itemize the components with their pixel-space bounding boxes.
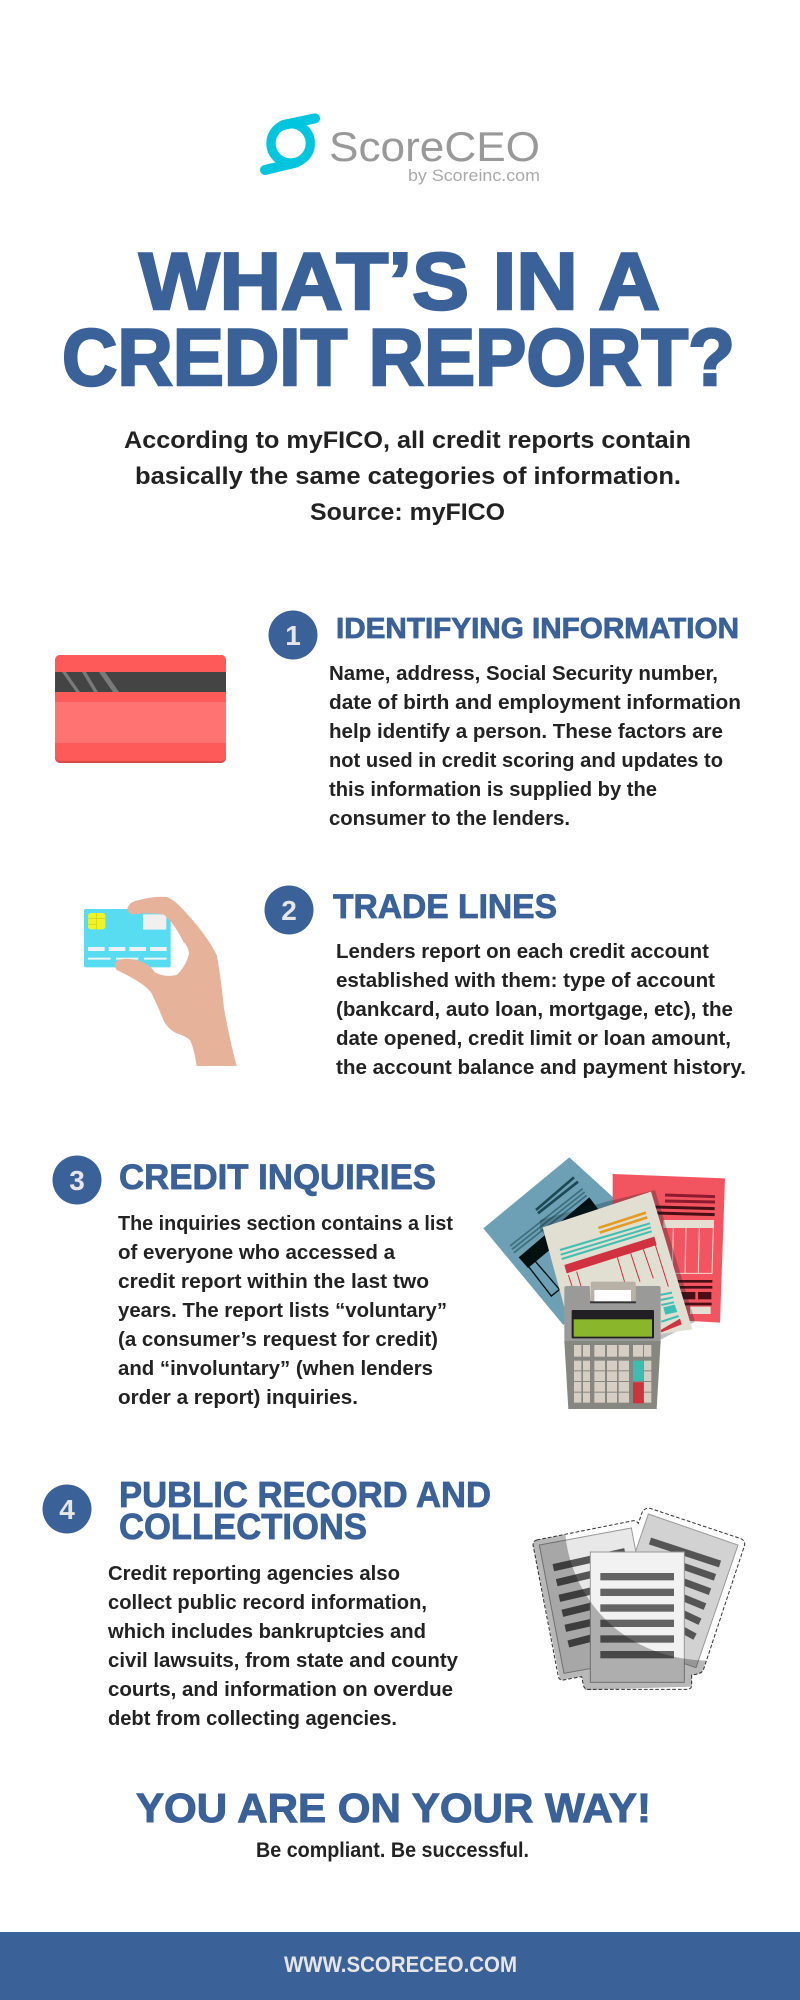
body text 4: debt from collecting agencies. — [108, 1707, 397, 1730]
body text 3: years. The report lists “voluntary” — [118, 1299, 447, 1322]
body text 3: credit report within the last two — [118, 1270, 429, 1293]
icon: stack of documents — [527, 1508, 745, 1697]
heading: trade lines: TRADE LINES — [333, 888, 557, 926]
body text 1: not used in credit scoring and updates to — [329, 749, 723, 772]
heading: public record and collections: COLLECTIONS — [119, 1506, 367, 1547]
body text 2: Lenders report on each credit account — [336, 940, 709, 963]
closing heading: YOU ARE ON YOUR WAY! — [136, 1785, 651, 1831]
body text 4: civil lawsuits, from state and county — [108, 1649, 459, 1672]
body text 3: of everyone who accessed a — [118, 1241, 396, 1264]
footer URL: WWW.SCORECEO.COM — [284, 1952, 517, 1977]
panel: identifying information — [55, 610, 741, 830]
logo tagline: by Scoreinc.com — [408, 166, 540, 185]
intro text — [124, 427, 691, 526]
intro text: basically the same categories of information. — [135, 463, 681, 490]
body text 2: the account balance and payment history. — [336, 1056, 746, 1079]
number badge 3: 3 — [69, 1165, 85, 1196]
intro text: Source: myFICO — [310, 499, 505, 526]
title: WHAT’S IN A — [139, 237, 660, 327]
body text 3 — [118, 1212, 453, 1409]
footer bar — [0, 1932, 800, 2000]
heading: credit inquiries: CREDIT INQUIRIES — [119, 1158, 436, 1197]
body text 2 — [336, 940, 746, 1079]
title — [62, 237, 735, 403]
icon: logo ring — [265, 118, 315, 170]
body text 2: (bankcard, auto loan, mortgage, etc), the — [336, 998, 733, 1021]
body text 1: help identify a person. These factors are — [329, 720, 723, 743]
body text 4: Credit reporting agencies also — [108, 1562, 400, 1585]
body text 4: courts, and information on overdue — [108, 1678, 453, 1701]
body text 4: collect public record information, — [108, 1591, 427, 1614]
heading: public record and collections — [119, 1474, 491, 1547]
body text 3: order a report) inquiries. — [118, 1386, 358, 1409]
panel: public record and collections — [42, 1474, 745, 1730]
number badge 2: 2 — [281, 895, 297, 926]
body text 1: date of birth and employment information — [329, 691, 741, 714]
body text 1 — [329, 662, 741, 830]
intro text: According to myFICO, all credit reports contain — [124, 427, 691, 454]
body text 4 — [107, 1562, 459, 1730]
number badge 1 — [268, 610, 318, 660]
number badge 4 — [42, 1484, 92, 1534]
title: CREDIT REPORT? — [62, 313, 735, 403]
body text 1: this information is supplied by the — [329, 778, 657, 801]
heading: public record and collections: PUBLIC RECORD AND — [119, 1474, 491, 1515]
icon: hand holding card — [84, 897, 237, 1066]
body text 3: The inquiries section contains a list — [118, 1212, 453, 1235]
body text 3: and “involuntary” (when lenders — [118, 1357, 433, 1380]
number badge 1: 1 — [285, 620, 301, 651]
body text 1: Name, address, Social Security number, — [329, 662, 718, 685]
heading: identifying information: IDENTIFYING INFORMATION — [336, 613, 739, 645]
number badge 3 — [52, 1156, 102, 1204]
logo: ScoreCEO — [265, 118, 540, 185]
panel: credit inquiries — [52, 1156, 725, 1409]
icon: red card back — [55, 655, 226, 763]
panel: trade lines — [84, 886, 746, 1079]
number badge 4: 4 — [59, 1494, 75, 1525]
logo wordmark: ScoreCEO — [329, 123, 540, 170]
icon: papers and calculator — [483, 1157, 725, 1409]
body text 2: date opened, credit limit or loan amount, — [336, 1027, 731, 1050]
body text 1: consumer to the lenders. — [329, 807, 570, 830]
body text 3: (a consumer’s request for credit) — [118, 1328, 438, 1351]
number badge 2 — [264, 886, 314, 934]
closing tagline: Be compliant. Be successful. — [256, 1839, 529, 1862]
body text 2: established with them: type of account — [336, 969, 715, 992]
body text 4: which includes bankruptcies and — [107, 1620, 426, 1643]
